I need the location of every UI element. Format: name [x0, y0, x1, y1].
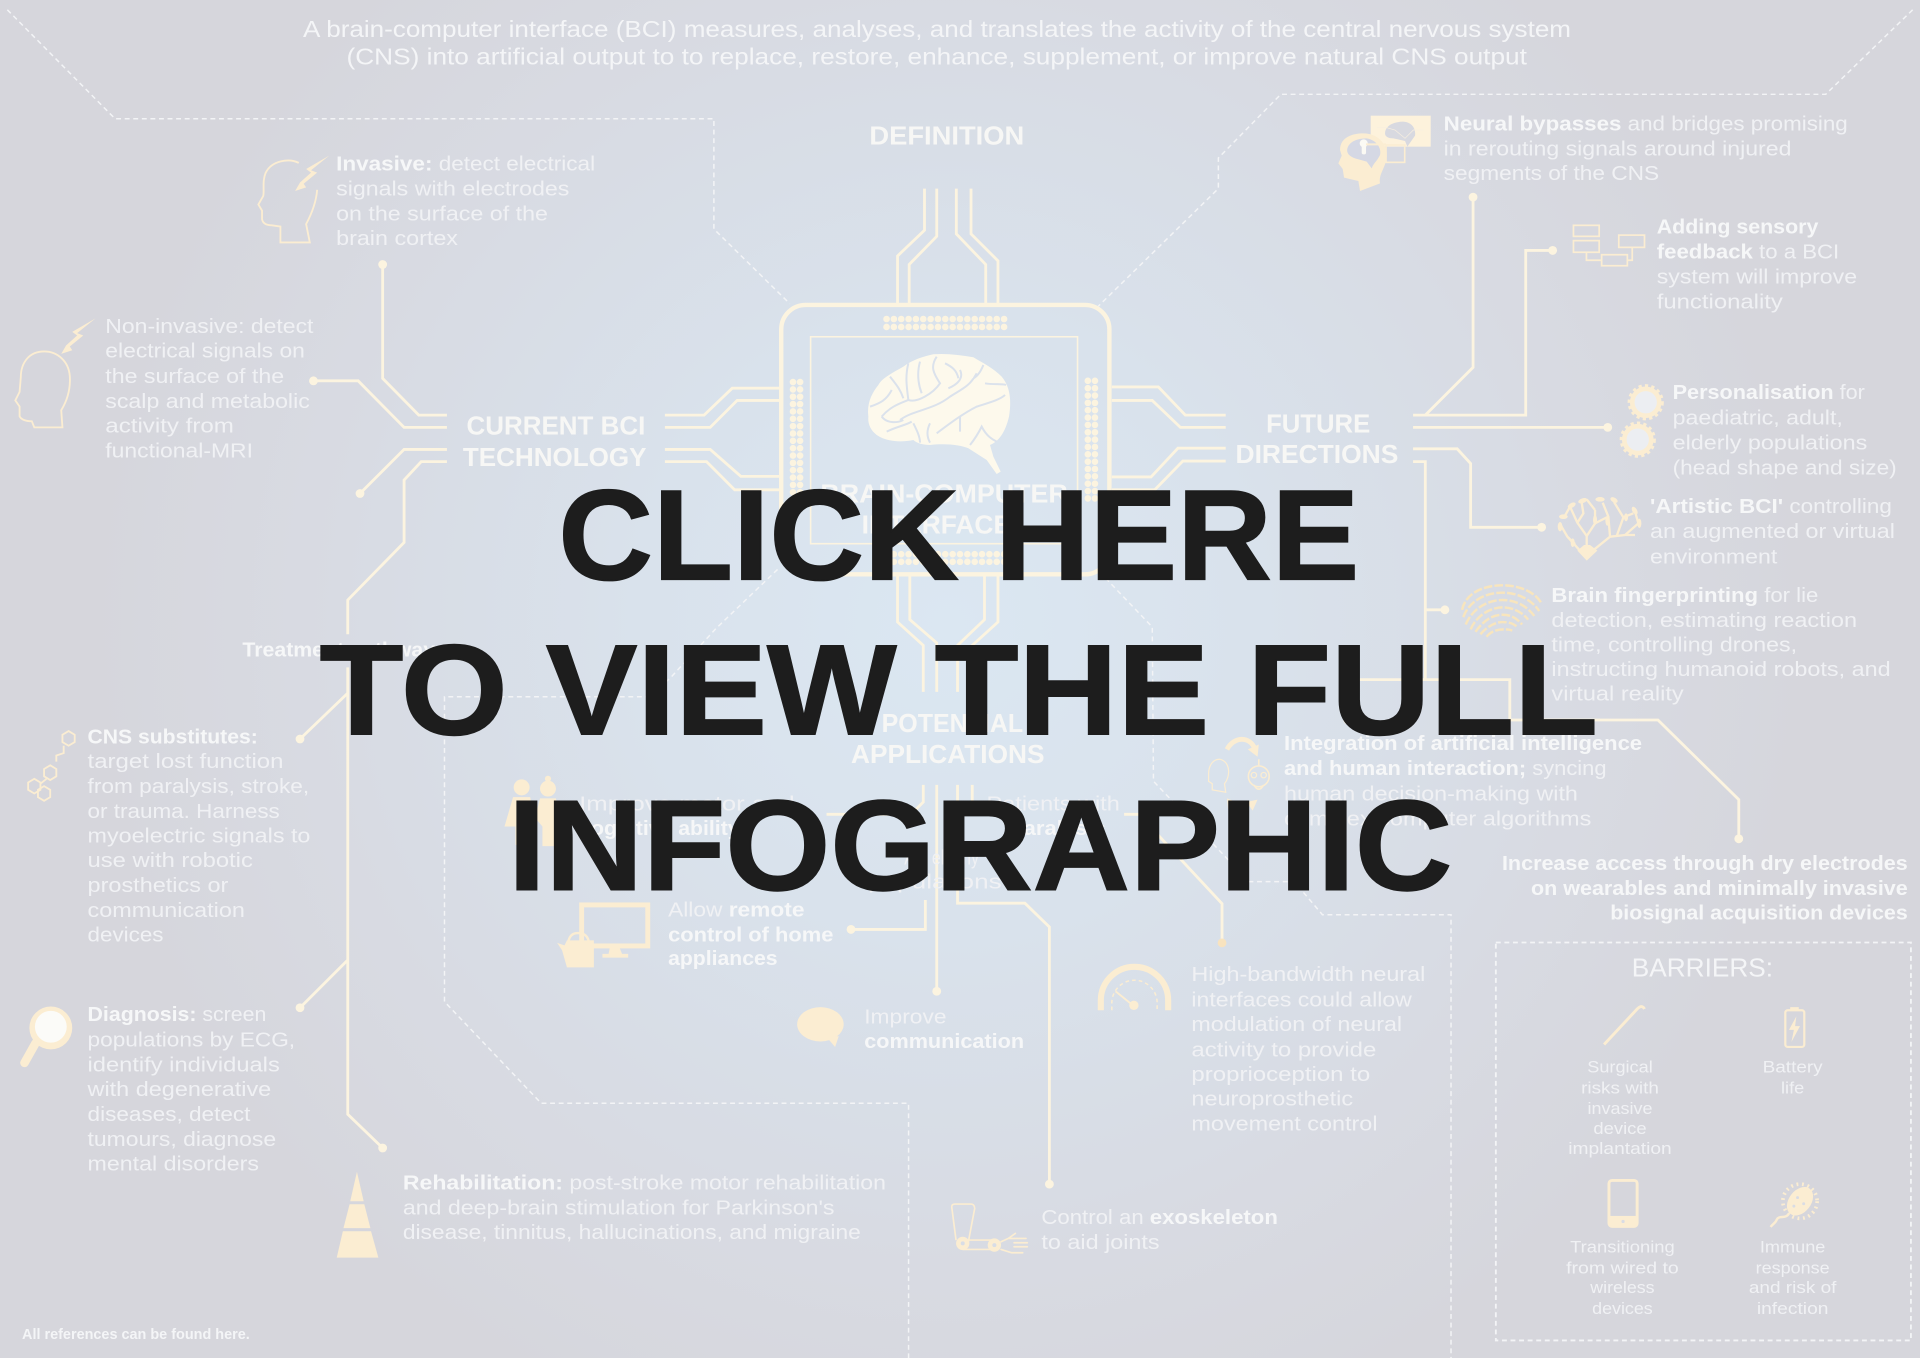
heading: future directions: DIRECTIONS: [1236, 441, 1398, 469]
icon: gauge: [1101, 967, 1168, 1010]
text: elderly populations: [868, 848, 1002, 893]
surgical risk text: Surgical: [1587, 1058, 1653, 1077]
text: non-invasive: the surface of the: [105, 366, 284, 388]
text: remote control: [668, 900, 833, 970]
panel: barriers: [1496, 943, 1911, 1340]
text: non-invasive: electrical signals on: [105, 341, 305, 363]
text: elderly populations: populations: [868, 871, 1002, 893]
surgical risk text: invasive: [1588, 1099, 1652, 1118]
wireless text: from wired to: [1566, 1258, 1679, 1277]
icon: molecule: [28, 731, 75, 801]
text: communication: [864, 1007, 1024, 1053]
call to action overlay: CLICK HERE: [558, 464, 1359, 607]
text: high-bandwidth: modulation of neural: [1191, 1014, 1402, 1036]
text: AI integration: Integration of artificial intelligence: [1284, 733, 1642, 755]
icon: bacterium: [1771, 1182, 1818, 1227]
text: communication: communication: [864, 1031, 1024, 1053]
text: patients with paralysis: Patients with: [987, 794, 1120, 816]
text: non-invasive: [105, 316, 314, 462]
battery text: [1763, 1058, 1823, 1097]
immune text: response: [1756, 1258, 1830, 1277]
text: communication: Improve: [864, 1007, 947, 1029]
battery text: life: [1781, 1078, 1804, 1097]
text: neural bypasses: segments of the CNS: [1444, 163, 1659, 185]
wireless text: devices: [1592, 1299, 1653, 1318]
text: AI integration: [1284, 733, 1642, 830]
text: patients with paralysis: paralysis: [1010, 818, 1106, 840]
text: artistic BCI: environment: [1650, 546, 1778, 568]
surgical risk text: [1568, 1058, 1672, 1158]
text: diagnosis: mental disorders: [88, 1154, 259, 1176]
icon: monitor and kettle: [557, 905, 648, 967]
intro definition text: (CNS) into artificial output to to replace, restore, enhance, supplement, or improve natural CNS output: [347, 43, 1528, 69]
text: personalisation: paediatric, adult,: [1673, 407, 1843, 429]
text: high-bandwidth: [1191, 964, 1425, 1136]
intro definition text: [303, 16, 1571, 69]
icon: surgical tool: [1604, 1007, 1644, 1045]
text: non-invasive: Non-invasive: detect: [105, 316, 314, 338]
text: exoskeleton: [1041, 1207, 1278, 1254]
text: high-bandwidth: interfaces could allow: [1191, 990, 1412, 1012]
chip title: [820, 481, 1068, 539]
text: AI integration: complex computer algorithms: [1284, 808, 1591, 830]
wireless text: Transitioning: [1570, 1238, 1675, 1257]
text: invasive: Invasive: detect electrical: [336, 154, 595, 176]
text: remote control: control of home: [668, 925, 833, 947]
text: motor and cognitive ability: cognitive ability: [579, 818, 740, 840]
text: artistic BCI: [1650, 496, 1895, 568]
text: motor and cognitive ability: [579, 794, 795, 840]
text: sensory feedback: Adding sensory: [1657, 217, 1819, 239]
icon: cone: [337, 1172, 378, 1258]
text: CNS substitutes: communication: [88, 900, 245, 922]
immune text: Immune: [1760, 1238, 1825, 1257]
surgical risk text: implantation: [1568, 1139, 1672, 1158]
text: non-invasive: activity from: [105, 415, 234, 437]
text: personalisation: [1673, 382, 1897, 479]
text: rehabilitation: and deep-brain stimulation for Parkinson's: [403, 1198, 834, 1220]
text: invasive: on the surface of the: [336, 203, 548, 225]
text: non-invasive: functional-MRI: [105, 440, 253, 462]
text: brain fingerprinting: time, controlling drones,: [1551, 634, 1797, 656]
text: high-bandwidth: neuroprosthetic: [1191, 1089, 1353, 1111]
text: dry electrodes: biosignal acquisition devices: [1610, 903, 1908, 925]
text: CNS substitutes: target lost function: [88, 751, 283, 773]
text: brain fingerprinting: Brain fingerprinting for lie: [1551, 585, 1818, 607]
text: rehabilitation: disease, tinnitus, hallucinations, and migraine: [403, 1222, 861, 1244]
text: diagnosis: tumours, diagnose: [88, 1129, 276, 1151]
references note: All references can be found here.: [22, 1327, 250, 1343]
text: brain fingerprinting: [1551, 585, 1891, 705]
heading: current BCI technology: CURRENT BCI: [467, 413, 645, 441]
text: diagnosis: populations by ECG,: [88, 1029, 295, 1051]
icon: brain tree: [1558, 496, 1641, 561]
text: high-bandwidth: movement control: [1191, 1114, 1378, 1136]
icon: couple: [504, 776, 560, 846]
icon: exoskeleton arm: [952, 1204, 1027, 1253]
icon: brain: [868, 354, 1010, 474]
text: non-invasive: scalp and metabolic: [105, 391, 310, 413]
text: neural bypasses: [1444, 113, 1848, 185]
text: sensory feedback: [1657, 217, 1857, 314]
text: CNS substitutes: or trauma. Harness: [88, 801, 280, 823]
wireless text: wireless: [1589, 1278, 1655, 1297]
text: brain fingerprinting: instructing humanoid robots, and: [1551, 659, 1891, 681]
icon: speech bubble: [797, 1007, 844, 1047]
text: treatment pathways: Treatment pathways: [242, 639, 447, 661]
icon: gears: [1621, 386, 1662, 456]
heading: potential applications: APPLICATIONS: [851, 741, 1044, 769]
immune text: [1749, 1238, 1837, 1318]
text: AI integration: human decision-making with: [1284, 783, 1578, 805]
wireless text: [1566, 1238, 1679, 1318]
call to action overlay: TO VIEW THE FULL: [320, 619, 1598, 762]
text: CNS substitutes: use with robotic: [88, 850, 253, 872]
text: rehabilitation: Rehabilitation: post-stroke motor rehabilitation: [403, 1173, 886, 1195]
surgical risk text: device: [1593, 1119, 1647, 1138]
text: neural bypasses: in rerouting signals around injured: [1444, 139, 1791, 161]
text: personalisation: elderly populations: [1673, 432, 1867, 454]
text: high-bandwidth: proprioception to: [1191, 1064, 1370, 1086]
icon: invasive head with bolt: [258, 156, 329, 242]
text: diagnosis: with degenerative: [86, 1079, 271, 1101]
text: CNS substitutes: myoelectric signals to: [88, 825, 310, 847]
battery text: Battery: [1763, 1058, 1823, 1077]
icon: phone: [1609, 1180, 1637, 1226]
chip title: BRAIN-COMPUTER: [820, 481, 1068, 509]
icon: human and AI: [1209, 739, 1269, 811]
text: elderly populations: Aid elderly: [904, 848, 980, 870]
text: neural bypasses: Neural bypasses and bridges promising: [1444, 113, 1848, 135]
text: CNS substitutes: CNS substitutes:: [88, 726, 258, 748]
text: personalisation: Personalisation for: [1673, 382, 1865, 404]
immune text: and risk of: [1749, 1278, 1837, 1297]
text: remote control: appliances: [668, 948, 778, 970]
call to action overlay: INFOGRAPHIC: [508, 775, 1452, 918]
text: sensory feedback: functionality: [1657, 292, 1784, 314]
text: CNS substitutes: from paralysis, stroke,: [88, 776, 309, 798]
text: diagnosis: Diagnosis: screen: [88, 1004, 266, 1026]
icon: neural bypass: [1338, 116, 1431, 191]
text: CNS substitutes: prosthetics or: [88, 875, 229, 897]
text: diagnosis: diseases, detect: [88, 1104, 251, 1126]
text: AI integration: and human interaction; syncing: [1284, 758, 1607, 780]
icon: sensory flow chart: [1573, 225, 1644, 266]
heading: definition: DEFINITION: [869, 123, 1024, 151]
text: remote control: Allow remote: [668, 900, 804, 922]
text: personalisation: (head shape and size): [1673, 457, 1897, 479]
immune text: infection: [1757, 1299, 1828, 1318]
text: sensory feedback: system will improve: [1657, 267, 1857, 289]
text: CNS substitutes: devices: [88, 925, 163, 947]
chip title: INTERFACE: [862, 511, 1011, 539]
text: invasive: signals with electrodes: [336, 178, 569, 200]
text: CNS substitutes: [88, 726, 310, 947]
heading: potential applications: [851, 710, 1044, 769]
surgical risk text: risks with: [1581, 1078, 1659, 1097]
icon: brain fingerprint: [1462, 585, 1542, 637]
text: rehabilitation: [403, 1173, 886, 1244]
text: artistic BCI: 'Artistic BCI' controlling: [1650, 496, 1892, 518]
text: sensory feedback: feedback to a BCI: [1657, 241, 1839, 263]
text: diagnosis: identify individuals: [88, 1054, 280, 1076]
icon: non-invasive head with bolt: [15, 318, 96, 427]
intro definition text: A brain-computer interface (BCI) measures, analyses, and translates the activity of the central nervous system: [303, 16, 1571, 42]
text: patients with paralysis: [987, 794, 1120, 840]
icon: magnifier: [24, 1007, 72, 1063]
text: high-bandwidth: activity to provide: [1191, 1039, 1376, 1061]
text: artistic BCI: an augmented or virtual: [1650, 521, 1895, 543]
heading: potential applications: POTENTIAL: [882, 710, 1023, 738]
text: dry electrodes: on wearables and minimally invasive: [1531, 878, 1908, 900]
text: exoskeleton: to aid joints: [1041, 1232, 1160, 1254]
heading: current BCI technology: TECHNOLOGY: [463, 444, 647, 472]
text: brain fingerprinting: detection, estimating reaction: [1551, 610, 1857, 632]
barriers heading: BARRIERS:: [1632, 955, 1773, 983]
text: motor and cognitive ability: Improve motor and: [579, 794, 795, 816]
heading: current BCI technology: [463, 413, 647, 472]
text: exoskeleton: Control an exoskeleton: [1041, 1207, 1278, 1229]
text: dry electrodes: Increase access through dry electrodes: [1502, 853, 1908, 875]
text: invasive: brain cortex: [336, 228, 458, 250]
icon: battery: [1785, 1007, 1804, 1047]
circuit traces: [296, 189, 1743, 1189]
central chip: [781, 305, 1109, 574]
text: diagnosis: [86, 1004, 295, 1176]
text: high-bandwidth: High-bandwidth neural: [1191, 964, 1425, 986]
text: dry electrodes: [1502, 853, 1908, 925]
text: brain fingerprinting: virtual reality: [1551, 683, 1685, 705]
call to action overlay: [320, 464, 1598, 918]
text: invasive: [336, 154, 595, 250]
heading: future directions: [1236, 410, 1398, 469]
heading: future directions: FUTURE: [1266, 410, 1370, 438]
